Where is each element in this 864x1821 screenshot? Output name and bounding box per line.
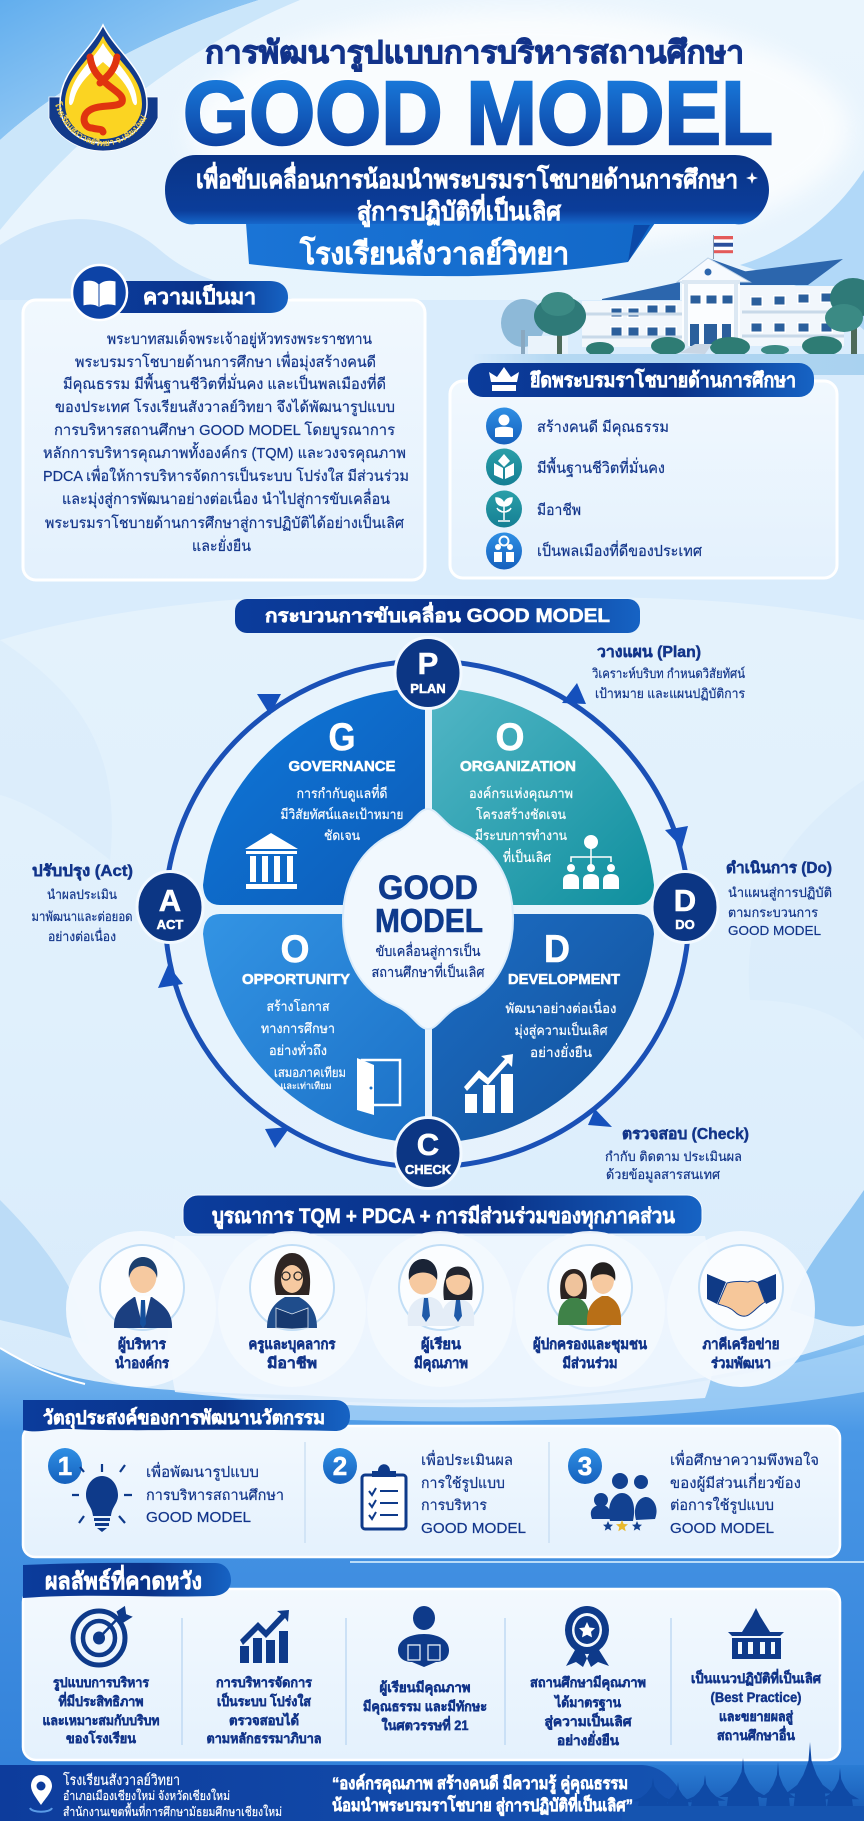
callout: Act (32, 863, 133, 944)
quadrant: Governance: GOVERNANCE (288, 759, 396, 775)
heading: process bar (235, 599, 640, 633)
school address: สำนักงานเขตพื้นที่การศึกษามัธยมศึกษาเชียงใหม่ (63, 1802, 282, 1819)
heading: expected results (23, 1563, 231, 1598)
objective 1: GOOD MODEL (146, 1510, 251, 1526)
centre: GOOD MODEL hub (343, 809, 513, 1029)
result 2: การบริหารจัดการ (216, 1675, 313, 1690)
objective 2: การบริหาร (421, 1498, 487, 1514)
result 3: ในศตวรรษที่ 21 (382, 1715, 469, 1733)
heading: process bar: กระบวนการขับเคลื่อน GOOD MODEL (265, 602, 610, 627)
text block: history: ของประเทศ โรงเรียนสังวาลย์วิทยา จึงได้พัฒนารูปแบบ (55, 398, 395, 416)
temple silhouettes (622, 1742, 864, 1821)
quadrant: Opportunity: ทางการศึกษา (261, 1021, 335, 1036)
result 1: ของโรงเรียน (66, 1729, 137, 1746)
callout: Act: มาพัฒนาและต่อยอด (32, 909, 132, 924)
objective 2: GOOD MODEL (421, 1521, 526, 1537)
callout: Check: ตรวจสอบ (Check) (622, 1126, 749, 1143)
quadrant: Organization: ORGANIZATION (460, 759, 576, 775)
node: Act (137, 872, 203, 942)
card: students: มีคุณภาพ (414, 1355, 468, 1372)
quadrant: Organization: O (496, 716, 524, 759)
centre: GOOD MODEL hub: สถานศึกษาที่เป็นเลิศ (372, 963, 485, 980)
heading: history: ความเป็นมา (143, 283, 256, 309)
objective 2: เพื่อประเมินผล (421, 1450, 513, 1469)
quadrant: Opportunity (203, 914, 425, 1143)
list item: good citizen (486, 532, 702, 570)
school logo: โรงเรียนสังวาลย์วิทยา จ.เชียงใหม่ (56, 101, 147, 146)
footer (0, 1742, 864, 1821)
node: Check: CHECK (405, 1162, 452, 1177)
quadrant: Governance (203, 688, 425, 905)
quadrant: Opportunity: และเท่าเทียม (280, 1080, 332, 1092)
result 3 (363, 1606, 487, 1733)
objective 1: การบริหารสถานศึกษา (146, 1488, 284, 1504)
node: Do: DO (675, 917, 695, 932)
list item: occupation: มีอาชีพ (537, 502, 581, 519)
card: teachers (218, 1231, 366, 1387)
quote (332, 1773, 633, 1817)
result 4: สถานศึกษามีคุณภาพ (530, 1675, 646, 1691)
objective 3: เพื่อศึกษาความพึงพอใจ (670, 1450, 819, 1469)
school address: โรงเรียนสังวาลย์วิทยา (63, 1771, 180, 1789)
centre: GOOD MODEL hub: MODEL (375, 902, 483, 939)
quadrant: Opportunity: อย่างทั่วถึง (269, 1041, 327, 1058)
panel: objectives (23, 1400, 840, 1557)
objective 3: 3 (578, 1451, 592, 1481)
school address (63, 1771, 282, 1819)
quadrant: Governance: G (328, 716, 356, 759)
result 5: (Best Practice) (710, 1690, 802, 1705)
icon: people with stars (591, 1473, 657, 1531)
panel: expected results (23, 1563, 840, 1760)
callout: Act: อย่างต่อเนื่อง (48, 928, 116, 944)
callout: Do: ตามกระบวนการ (728, 905, 818, 920)
icon: checklist clipboard (362, 1464, 406, 1529)
icon: quality award ribbon (565, 1606, 609, 1667)
heading: TQM + PDCA bar (183, 1195, 702, 1234)
card: teachers: มีอาชีพ (267, 1355, 317, 1372)
callout: Do: ดำเนินการ (Do) (726, 859, 832, 877)
icon: growth chart (240, 1610, 289, 1663)
card: parents and community (515, 1231, 665, 1387)
callout: Plan (591, 644, 745, 701)
card: network partners (667, 1231, 815, 1387)
heading: expected results: ผลลัพธ์ที่คาดหวัง (45, 1564, 202, 1594)
callout: Do: GOOD MODEL (728, 923, 821, 938)
heading: objectives (23, 1400, 350, 1431)
icon: light bulb (72, 1464, 132, 1532)
node: Check: C (417, 1127, 439, 1162)
card: parents and community: ผู้ปกครองและชุมชน (533, 1336, 647, 1353)
icon: target (73, 1608, 130, 1665)
callout: Plan: เป้าหมาย และแผนปฏิบัติการ (595, 686, 745, 701)
quadrant: Governance: ชัดเจน (324, 828, 360, 843)
result 5: และขยายผลสู่ (719, 1709, 794, 1725)
result 5: สถานศึกษาอื่น (717, 1725, 796, 1743)
result 4: สู่ความเป็นเลิศ (544, 1712, 632, 1730)
text block: history: พระบรมราโชบายด้านการศึกษาสู่การปฏิบัติได้อย่างเป็นเลิศ (45, 513, 404, 532)
quadrant: Opportunity: เสมอภาคเทียม (274, 1065, 346, 1080)
quadrant: Development: D (544, 928, 570, 971)
result 1 (42, 1608, 160, 1746)
list item: good person: สร้างคนดี มีคุณธรรม (537, 419, 669, 437)
callout: Plan: วางแผน (Plan) (597, 644, 701, 661)
illustration: school building (470, 235, 864, 375)
school address: อำเภอเมืองเชียงใหม่ จังหวัดเชียงใหม่ (63, 1789, 230, 1803)
quadrant: Organization (432, 688, 654, 905)
arrows on PDCA ring (158, 683, 688, 1148)
panel: royal education policy (450, 363, 837, 578)
callout: Plan: วิเคราะห์บริบท กำหนดวิสัยทัศน์ (591, 666, 745, 681)
callout: Do (726, 859, 832, 938)
callout: Do: นำแผนสู่การปฏิบัติ (728, 885, 832, 901)
result 4: ได้มาตรฐาน (553, 1694, 622, 1712)
subtitle banner: โรงเรียนสังวาลย์วิทยา (299, 235, 569, 271)
heading: royal policy (468, 363, 814, 397)
subtitle banner: สู่การปฏิบัติที่เป็นเลิศ (357, 194, 562, 228)
quadrant: Development: พัฒนาอย่างต่อเนื่อง (506, 999, 616, 1016)
quadrant: Development: DEVELOPMENT (508, 972, 620, 988)
quadrant: Development (432, 914, 654, 1143)
card: network partners: ร่วมพัฒนา (711, 1356, 771, 1372)
result 2: เป็นระบบ โปร่งใส (217, 1692, 312, 1709)
centre: GOOD MODEL hub: ขับเคลื่อนสู่การเป็น (376, 942, 481, 960)
card: students: ผู้เรียน (421, 1336, 461, 1353)
result 2: ตามหลักธรรมาภิบาล (206, 1731, 322, 1746)
result 5 (691, 1608, 821, 1743)
result 5: เป็นแนวปฏิบัติที่เป็นเลิศ (691, 1668, 821, 1687)
list item: stable foundation (486, 448, 665, 486)
heading: royal policy: ยึดพระบรมราโชบายด้านการศึกษา (530, 368, 796, 392)
card: executives (66, 1231, 216, 1387)
quote: “องค์กรคุณภาพ สร้างคนดี มีความรู้ คู่คุณธรรม (332, 1773, 628, 1795)
icon: location pin (30, 1775, 52, 1812)
quote: น้อมนำพระบรมราโชบาย สู่การปฏิบัติที่เป็นเลิศ” (332, 1793, 633, 1817)
icon: reader with book (398, 1606, 449, 1667)
quadrant: Organization: มีระบบการทำงาน (475, 828, 567, 843)
card: students (367, 1231, 513, 1387)
heading: TQM + PDCA bar: บูรณาการ TQM + PDCA + การมีส่วนร่วมของทุกภาคส่วน (212, 1204, 676, 1230)
quadrant: Organization: โครงสร้างชัดเจน (476, 806, 566, 822)
objective 1 (48, 1448, 284, 1532)
node: Check (395, 1118, 461, 1188)
list item: occupation (486, 490, 581, 528)
text block: history: หลักการบริหารคุณภาพทั้งองค์กร (TQM) และวงจรคุณภาพ (43, 442, 406, 463)
quadrant: Development: มุ่งสู่ความเป็นเลิศ (514, 1021, 608, 1039)
text block: history: และมุ่งสู่การพัฒนาอย่างต่อเนื่อง นำไปสู่การขับเคลื่อน (62, 488, 390, 509)
quadrant: Governance: มีวิสัยทัศน์และเป้าหมาย (280, 806, 404, 822)
quadrant: Organization: ที่เป็นเลิศ (503, 848, 551, 865)
title: การพัฒนารูปแบบการบริหารสถานศึกษา (205, 35, 744, 72)
result 1: ที่มีประสิทธิภาพ (58, 1691, 144, 1709)
result 1: และเหมาะสมกับบริบท (42, 1713, 160, 1728)
text block: history: พระบรมราโชบายด้านการศึกษา เพื่อมุ่งสร้างคนดี (75, 351, 376, 372)
quadrant: Development: อย่างยั่งยืน (530, 1043, 592, 1060)
heading: objectives: วัตถุประสงค์ของการพัฒนานวัตกรรม (43, 1407, 325, 1430)
quadrant: Opportunity: OPPORTUNITY (242, 972, 350, 988)
objective 2: การใช้รูปแบบ (421, 1474, 505, 1492)
card: parents and community: มีส่วนร่วม (562, 1355, 618, 1372)
text block: history: มีคุณธรรม มีพื้นฐานชีวิตที่มั่นคง และเป็นพลเมืองที่ดี (63, 373, 386, 394)
text block: history: การบริหารสถานศึกษา GOOD MODEL โดยบูรณาการ (54, 421, 395, 439)
subtitle banner (165, 155, 769, 276)
quadrant: Opportunity: สร้างโอกาส (266, 998, 330, 1014)
result 3: มีคุณธรรม และมีทักษะ (363, 1699, 487, 1715)
callout: Check: กำกับ ติดตาม ประเมินผล (605, 1149, 742, 1164)
objective 2: 2 (333, 1451, 347, 1481)
icon: temple pillars (245, 833, 298, 889)
quadrant: Organization: องค์กรแห่งคุณภาพ (469, 785, 573, 802)
node: Do (652, 872, 718, 942)
node: Plan (395, 638, 461, 708)
result 4: อย่างยั่งยืน (557, 1730, 620, 1748)
title: GOOD MODEL (183, 64, 773, 164)
icon: model school (728, 1608, 784, 1659)
list item: good person (486, 408, 669, 444)
result 4 (530, 1606, 646, 1748)
icon: rising bar chart (464, 1054, 513, 1113)
chart: PDCA cycle diagram (137, 638, 718, 1188)
objective 3: ของผู้มีส่วนเกี่ยวข้อง (670, 1473, 801, 1492)
subtitle banner: เพื่อขับเคลื่อนการน้อมนำพระบรมราโชบายด้านการศึกษา (196, 162, 738, 194)
card: executives: นำองค์กร (115, 1354, 169, 1372)
heading: history (72, 265, 288, 320)
objective 3: ต่อการใช้รูปแบบ (670, 1496, 774, 1514)
stakeholders row (66, 1231, 815, 1387)
list item: stable foundation: มีพื้นฐานชีวิตที่มั่นคง (537, 457, 665, 477)
result 2: ตรวจสอบได้ (229, 1712, 299, 1728)
text block: history: PDCA เพื่อให้การบริหารจัดการเป็นระบบ โปร่งใส มีส่วนร่วม (43, 465, 409, 485)
objective 3 (568, 1448, 819, 1537)
quadrant: Governance: การกำกับดูแลที่ดี (296, 784, 388, 802)
icon: organization chart (563, 836, 619, 889)
centre: GOOD MODEL hub: GOOD (378, 869, 478, 907)
objective 3: GOOD MODEL (670, 1521, 774, 1537)
objective 2 (323, 1448, 526, 1537)
card: executives: ผู้บริหาร (118, 1336, 166, 1353)
card: teachers: ครูและบุคลากร (248, 1337, 336, 1353)
panel: background history (23, 265, 425, 580)
callout: Act: ปรับปรุง (Act) (32, 863, 133, 881)
quadrant: Opportunity: O (280, 928, 310, 971)
node: Plan: P (418, 646, 438, 681)
callout: Act: นำผลประเมิน (47, 887, 117, 902)
card: network partners: ภาคีเครือข่าย (702, 1336, 780, 1353)
result 1: รูปแบบการบริหาร (53, 1675, 150, 1691)
callout: Check: ด้วยข้อมูลสารสนเทศ (606, 1167, 721, 1183)
list item: good citizen: เป็นพลเมืองที่ดีของประเทศ (537, 540, 702, 560)
icon: open door (357, 1058, 400, 1115)
callout: Check (605, 1126, 749, 1183)
node: Act: ACT (157, 917, 183, 932)
text block: history (43, 329, 409, 555)
school logo (48, 24, 158, 152)
result 2 (206, 1610, 322, 1746)
node: Do: D (674, 883, 696, 918)
node: Plan: PLAN (410, 681, 446, 696)
objective 1: เพื่อพัฒนารูปแบบ (146, 1462, 259, 1481)
text block: history: และยั่งยืน (192, 535, 251, 555)
objective 1: 1 (58, 1451, 72, 1481)
text block: history: พระบาทสมเด็จพระเจ้าอยู่หัวทรงพระราชทาน (107, 329, 372, 348)
node: Act: A (159, 883, 181, 918)
result 3: ผู้เรียนมีคุณภาพ (380, 1680, 471, 1696)
